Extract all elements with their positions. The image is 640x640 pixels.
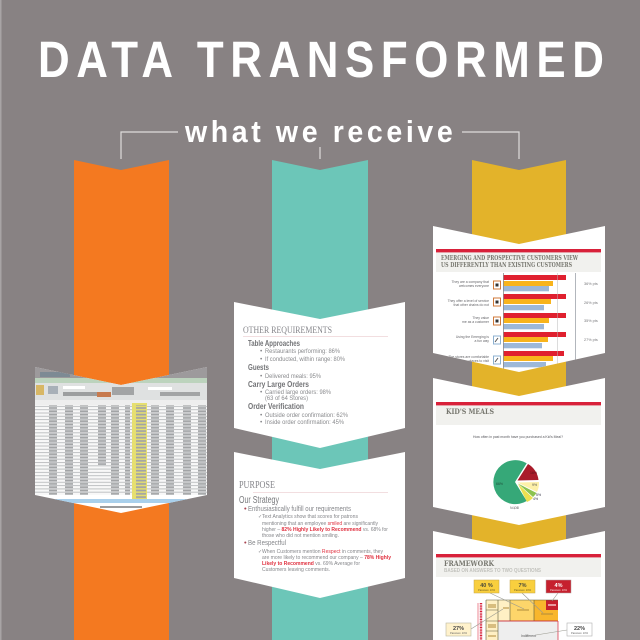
requirements list: Carry Large Orders [248, 380, 309, 389]
requirements list: Inside order confirmation: 45% [265, 419, 344, 426]
requirements list: Table Approaches [248, 339, 300, 348]
gap values: 35% pts [584, 319, 598, 323]
pie chart: 9% [532, 483, 537, 487]
heading: emerging customers: US DIFFERENTLY THAN EXISTING CUSTOMERS [441, 262, 572, 269]
bar labels: Using the Emerging is [456, 335, 489, 339]
subtitle: what we receive: what we receive [184, 115, 453, 149]
stat: 27%: 27% [453, 626, 464, 632]
title: DATA TRANSFORMED [38, 32, 604, 89]
requirements list: • [260, 373, 263, 380]
stat: 27%: Passives: 10% [450, 631, 468, 635]
pie chart [493, 460, 541, 510]
gap values: 26% pts [584, 301, 598, 305]
framework matrix [478, 600, 558, 640]
strategy text: Enthusiastically fulfill our requirements [248, 504, 351, 513]
pie chart: 66% [496, 482, 503, 486]
stat: 7%: 7% [519, 583, 527, 589]
strategy text: Text Analytics show that scores for patrons [262, 514, 358, 520]
bar labels [448, 280, 490, 363]
stat: 4%: Passives: 10% [550, 588, 568, 592]
strategy text: • [244, 538, 247, 547]
requirements list: Restaurants performing: 86% [265, 348, 340, 355]
bar chart [503, 273, 576, 373]
stat: 22%: 22% [574, 626, 585, 632]
bar labels: They value [472, 316, 489, 320]
strategy text [239, 495, 392, 573]
requirements list: • [260, 356, 263, 363]
strategy text: mentioning that an employee smiled are significantly [262, 521, 378, 527]
strategy text: those who did not mention smiling. [262, 533, 339, 539]
orange band [74, 160, 169, 640]
requirements list: If conducted, within range: 80% [265, 356, 345, 363]
heading: emerging customers [441, 255, 578, 267]
strategy text: ✓ [258, 549, 262, 555]
bar labels: They are a company that [451, 280, 489, 284]
strategy text: Likely to Recommend vs. 69% Average for [262, 561, 360, 567]
stat: 40% [474, 580, 499, 593]
panel: emerging customers chart [433, 226, 605, 373]
subheading: framework: BASED ON ANSWERS TO TWO QUESTIONS [444, 568, 542, 574]
yellow band [472, 160, 566, 640]
stat: 22% [567, 623, 592, 636]
pie chart: 16% [530, 471, 537, 475]
stat: 40%: Passives: 10% [478, 588, 496, 592]
bar labels: The stores are comfortable [448, 355, 489, 359]
requirements list: Outside order confirmation: 62% [265, 412, 348, 419]
panel: other requirements [234, 302, 405, 448]
requirements list: • [260, 412, 263, 419]
panel: framework [433, 531, 605, 640]
heading: framework: FRAMEWORK [444, 559, 494, 568]
pie chart: 5% [536, 493, 541, 497]
question: How often in past month have you purchased a Kid's Meal? [473, 435, 563, 439]
strategy text: Customers leaving comments. [262, 567, 330, 573]
bar labels: They offer a level of service [448, 299, 489, 303]
panel: purpose [234, 452, 405, 598]
stat: 7% [510, 580, 535, 593]
requirements list: • [260, 419, 263, 426]
requirements list: Guests [248, 363, 269, 372]
bar labels: places to visit [469, 359, 489, 363]
bar labels: me as a customer [462, 320, 490, 324]
stat: 27% [446, 623, 471, 636]
stat: 4%: 4% [555, 583, 563, 589]
framework matrix: Indifferent [521, 634, 536, 638]
requirements list [248, 339, 348, 426]
heading: emerging customers: EMERGING AND PROSPECTIVE CUSTOMERS VIEW [441, 255, 578, 262]
connector lines [471, 593, 567, 635]
stat: 40%: 40 % [480, 583, 493, 589]
strategy text: are more likely to recommend our company – 78% Highly [262, 555, 392, 561]
gap values [584, 282, 598, 342]
gap values: 36% pts [584, 282, 598, 286]
requirements list: Carried large orders: 98% [265, 389, 331, 396]
teal band [272, 160, 368, 640]
heading: purpose: PURPOSE [239, 480, 275, 491]
heading: other requirements: OTHER REQUIREMENTS [243, 326, 332, 336]
strategy text: • [244, 504, 247, 513]
bracket connectors [121, 132, 519, 159]
strategy text: Be Respectful [248, 538, 286, 547]
requirements list: • [260, 389, 263, 396]
stat: 22%: Passives: 10% [571, 631, 589, 635]
panel: spreadsheet [35, 367, 207, 513]
requirements list: (63 of 64 Stores) [265, 395, 308, 402]
pie chart: 4% [533, 497, 538, 501]
requirements list: Order Verification [248, 402, 304, 411]
bar labels: welcomes everyone [459, 284, 489, 288]
requirements list: Delivered meals: 95% [265, 373, 321, 380]
strategy text: Our Strategy [239, 495, 279, 506]
stat: 7%: Passives: 10% [514, 588, 532, 592]
strategy text: higher – 82% Highly Likely to Recommend vs. 68% for [262, 527, 388, 533]
bar labels: that other chains do not [454, 303, 489, 307]
stat: 4% [546, 580, 571, 593]
bar labels: a fun way [474, 339, 489, 343]
panel: kid's meals [433, 378, 605, 525]
heading: kid's meals: KID'S MEALS [446, 407, 494, 416]
requirements list: • [260, 348, 263, 355]
strategy text: When Customers mention Respect in comments, they [262, 549, 383, 555]
icons: answer markers [494, 281, 500, 364]
strategy text: ✓ [258, 514, 262, 520]
gap values: 27% pts [584, 338, 598, 342]
pie chart: N=1,045 [510, 506, 519, 510]
